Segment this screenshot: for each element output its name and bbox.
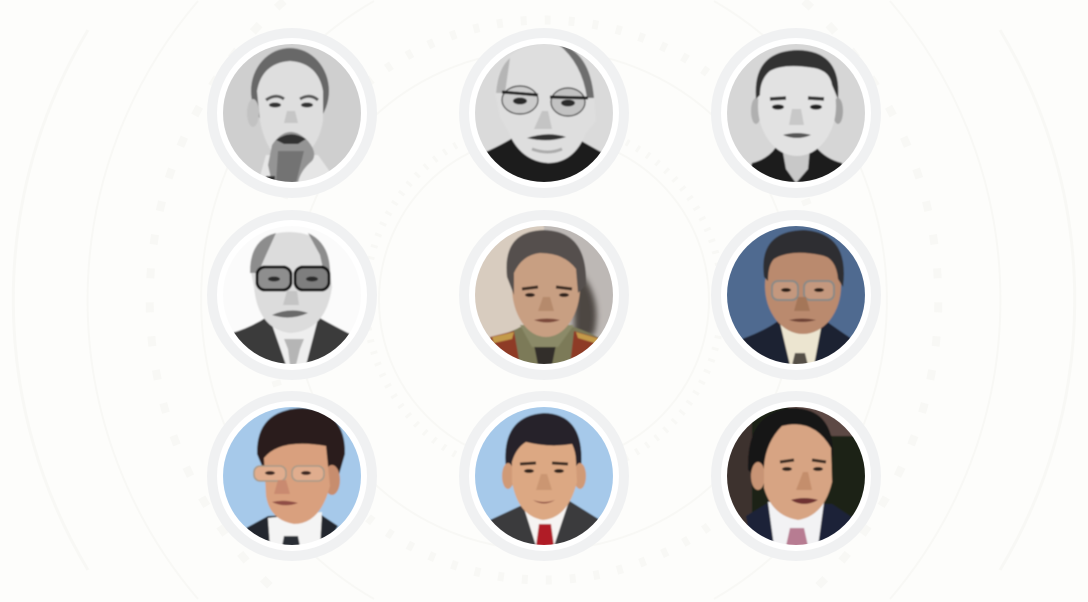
portrait 7: rimless glasses, light blue backdrop	[207, 391, 377, 561]
portrait 5: military uniform, colour	[459, 210, 629, 380]
frame ring	[459, 28, 629, 198]
frame ring	[207, 210, 377, 380]
frame ring	[711, 391, 881, 561]
portrait 6: glasses, navy suit, blue backdrop	[711, 210, 881, 380]
photo	[726, 406, 866, 546]
portrait 2: bald, glasses, greyscale	[459, 28, 629, 198]
photo	[234, 232, 350, 364]
portrait 1: white goatee, greyscale	[207, 28, 377, 198]
photo	[469, 43, 614, 183]
frame ring	[459, 391, 629, 561]
portrait 3: dark hair, dark collar, greyscale	[711, 28, 881, 198]
infographic canvas	[207, 28, 881, 561]
photo	[474, 406, 614, 546]
frame ring	[207, 28, 377, 198]
photo	[222, 406, 362, 546]
frame ring	[459, 210, 629, 380]
photo	[726, 225, 866, 365]
photo	[474, 225, 614, 365]
portrait 4: tinted glasses, suit, greyscale	[207, 210, 377, 380]
portrait 8: red tie, light blue backdrop	[459, 391, 629, 561]
photo	[726, 43, 866, 183]
frame ring	[711, 210, 881, 380]
frame ring	[207, 391, 377, 561]
photo	[222, 43, 362, 183]
portrait 9: pink tie, dark backdrop	[711, 391, 881, 561]
frame ring	[711, 28, 881, 198]
